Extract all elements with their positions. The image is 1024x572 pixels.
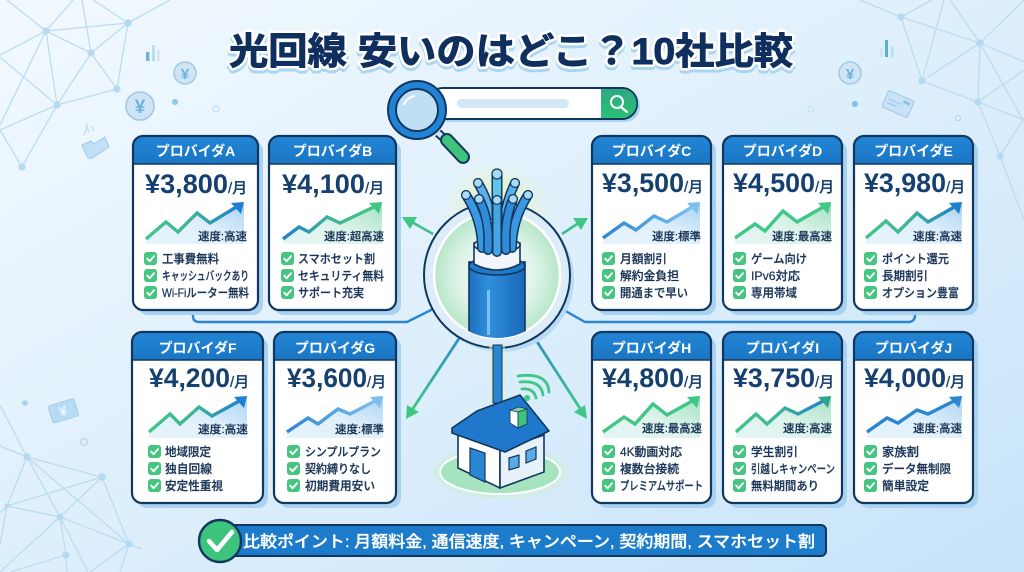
- feature list: データ無制限: [882, 461, 951, 476]
- feature list: IPv6対応: [751, 268, 800, 283]
- feature list: オプション豊富: [882, 285, 959, 300]
- card: provider D: [723, 136, 847, 315]
- price: ¥3,600: [287, 363, 367, 393]
- price: /月: [815, 179, 834, 196]
- speed chart: [867, 396, 962, 438]
- decorative ring: [213, 106, 219, 112]
- price: ¥4,200: [149, 363, 230, 393]
- icon: check circle: [199, 520, 241, 562]
- cable body: [469, 257, 525, 340]
- optical fibers: [462, 169, 532, 252]
- feature list: シンプルプラン: [305, 445, 381, 459]
- feature list: 4K動画対応: [620, 444, 682, 459]
- speed label: 速度:高速: [198, 229, 247, 243]
- icon: yen coin large left: [126, 92, 154, 120]
- price: ¥4,800: [602, 363, 684, 393]
- arrow: upper right: [562, 218, 588, 234]
- feature list: 独自回線: [165, 461, 212, 476]
- feature list: [733, 251, 807, 300]
- speed chart: [736, 396, 831, 438]
- icon: credit card: [882, 90, 914, 118]
- feature list: Wi-Fiルーター無料: [162, 285, 249, 300]
- feature list: 契約縛りなし: [305, 461, 371, 476]
- card: provider I: [723, 332, 847, 508]
- card: provider G: [274, 332, 401, 508]
- speed label: 速度:高速: [913, 229, 962, 243]
- icon: bars left: [146, 45, 160, 61]
- feature list: 安定性重視: [165, 478, 223, 493]
- door: [470, 448, 485, 482]
- decorative dot right: [852, 101, 858, 107]
- price: /月: [946, 179, 965, 196]
- card: provider B: [269, 136, 401, 315]
- feature list: 地域限定: [165, 444, 211, 459]
- name: プロバイダE: [874, 143, 953, 159]
- price: /月: [946, 374, 965, 391]
- speed chart: [149, 396, 247, 438]
- network pattern: top left: [0, 0, 170, 171]
- speed label: 速度:高速: [783, 421, 832, 435]
- speed chart: [603, 396, 700, 438]
- card: provider F: [132, 332, 268, 508]
- search field: [428, 88, 640, 122]
- card: provider A: [133, 136, 263, 315]
- price: /月: [367, 374, 386, 391]
- feature list: 月額割引: [620, 252, 667, 266]
- price: /月: [230, 374, 249, 391]
- roof: [452, 395, 549, 452]
- feature list: [864, 444, 951, 493]
- network pattern: top right: [860, 0, 1024, 220]
- connection pipe to house: [489, 345, 505, 403]
- name: プロバイダH: [612, 340, 691, 356]
- title: 光回線 安いのはどこ？10社比較: [229, 34, 793, 75]
- icon: yen ticket: ¥: [57, 402, 69, 420]
- side wall: [500, 435, 544, 488]
- name: プロバイダC: [612, 143, 691, 159]
- price: ¥3,500: [602, 168, 684, 198]
- wifi signal: [518, 375, 549, 401]
- price: /月: [684, 374, 703, 391]
- price: ¥3,980: [864, 168, 946, 198]
- speed chart: [287, 396, 383, 438]
- feature list: サポート充実: [298, 285, 364, 300]
- title: 光回線 安いのはどこ？10社比較: [229, 31, 793, 72]
- decorative dot: [172, 99, 178, 105]
- feature list: [144, 251, 249, 300]
- connector: right line to provider cards: [562, 309, 915, 322]
- feature list: [864, 252, 959, 300]
- feature list: キャッシュバックあり: [162, 269, 249, 283]
- speed chart: [866, 202, 962, 244]
- speed label: 速度:標準: [335, 422, 384, 436]
- feature list: 初期費用安い: [305, 478, 375, 493]
- feature list: 複数台接続: [620, 461, 679, 476]
- price: /月: [228, 180, 247, 197]
- speed chart: [735, 202, 831, 244]
- feature list: 解約金負担: [620, 268, 679, 283]
- price: ¥4,000: [864, 363, 946, 393]
- decorative ring bottom left: [81, 439, 87, 445]
- feature list: 専用帯域: [751, 285, 797, 300]
- card: provider H: [592, 332, 716, 508]
- speed chart: [146, 202, 244, 244]
- feature list: 無料期間あり: [751, 478, 819, 493]
- feature list: セキュリティ無料: [298, 268, 384, 283]
- feature list: 学生割引: [751, 444, 798, 459]
- feature list: [287, 445, 381, 493]
- feature list: 家族割: [882, 444, 919, 459]
- feature list: ゲーム向け: [751, 251, 807, 266]
- feature list: 簡単設定: [882, 478, 929, 493]
- search bar with magnifier: [388, 81, 640, 157]
- speed label: 速度:標準: [652, 229, 701, 243]
- price: /月: [365, 180, 384, 197]
- card: provider J: [854, 332, 978, 508]
- feature list: [602, 444, 703, 493]
- icon: yen coin right: [839, 62, 861, 84]
- banner bar: [215, 525, 826, 556]
- price: /月: [815, 374, 834, 391]
- speed label: 速度:最高速: [772, 229, 832, 243]
- cable collar: [474, 238, 520, 270]
- price: ¥3,800: [145, 169, 228, 199]
- icon: yen coin right: ¥: [846, 66, 855, 83]
- card: provider C: [592, 136, 716, 315]
- speed chart: [283, 202, 382, 244]
- feature list: [602, 252, 688, 300]
- name: プロバイダA: [156, 143, 235, 159]
- name: プロバイダG: [295, 340, 375, 356]
- icon: yen coin small left: [174, 62, 196, 84]
- windows: [509, 447, 536, 470]
- price: ¥3,750: [733, 363, 815, 393]
- feature list: 引越しキャンペーン: [751, 461, 835, 476]
- feature list: スマホセット割: [298, 252, 375, 266]
- card: provider E: [854, 136, 978, 315]
- price: ¥4,100: [282, 169, 365, 199]
- decorative ring right: [808, 106, 814, 112]
- feature list: [733, 444, 835, 493]
- name: プロバイダI: [746, 340, 819, 356]
- arrow: lower left: [406, 337, 460, 419]
- price: /月: [684, 179, 703, 196]
- name: プロバイダF: [158, 340, 237, 356]
- house: [433, 375, 567, 499]
- magnifying glass: [388, 81, 463, 157]
- feature list: 開通まで早い: [620, 286, 688, 300]
- decorative dot bottom left: [22, 400, 28, 406]
- speed label: 速度:超高速: [324, 229, 384, 243]
- banner text: 比較ポイント: 月額料金, 通信速度, キャンペーン, 契約期間, スマホセット割: [243, 533, 815, 551]
- feature list: [281, 252, 384, 300]
- arrow: lower right: [534, 337, 587, 419]
- feature list: [148, 444, 223, 493]
- router box: [510, 407, 527, 428]
- glow: [442, 160, 552, 270]
- feature list: 長期割引: [882, 269, 928, 283]
- icon: bars right: [880, 40, 894, 57]
- arrow: upper left: [402, 217, 433, 234]
- speed chart: [603, 202, 700, 244]
- name: プロバイダJ: [875, 340, 952, 356]
- walls: [458, 417, 500, 488]
- icon: yen ticket: [48, 398, 79, 423]
- circle frame: [424, 202, 574, 352]
- feature list: ポイント還元: [882, 252, 949, 266]
- speed label: 速度:最高速: [642, 421, 702, 435]
- icon: folder: [82, 123, 109, 158]
- network pattern: bottom left: [0, 405, 142, 572]
- connector: left line to provider cards: [193, 309, 433, 322]
- decorative ring far right: [955, 115, 961, 121]
- ground: [433, 445, 567, 499]
- icon: yen coin large left: ¥: [135, 97, 146, 118]
- name: プロバイダD: [743, 143, 822, 159]
- fiber cable in circle: [424, 160, 574, 352]
- feature list: 工事費無料: [162, 251, 219, 266]
- comparison points banner: [199, 520, 826, 562]
- title: 光回線 安いのはどこ？10社比較: [229, 31, 793, 72]
- name: プロバイダB: [293, 143, 372, 159]
- speed label: 速度:高速: [913, 421, 962, 435]
- speed label: 速度:高速: [198, 422, 248, 436]
- price: ¥4,500: [733, 168, 815, 198]
- icon: yen coin small left: ¥: [181, 66, 190, 83]
- feature list: プレミアムサポート: [620, 479, 703, 493]
